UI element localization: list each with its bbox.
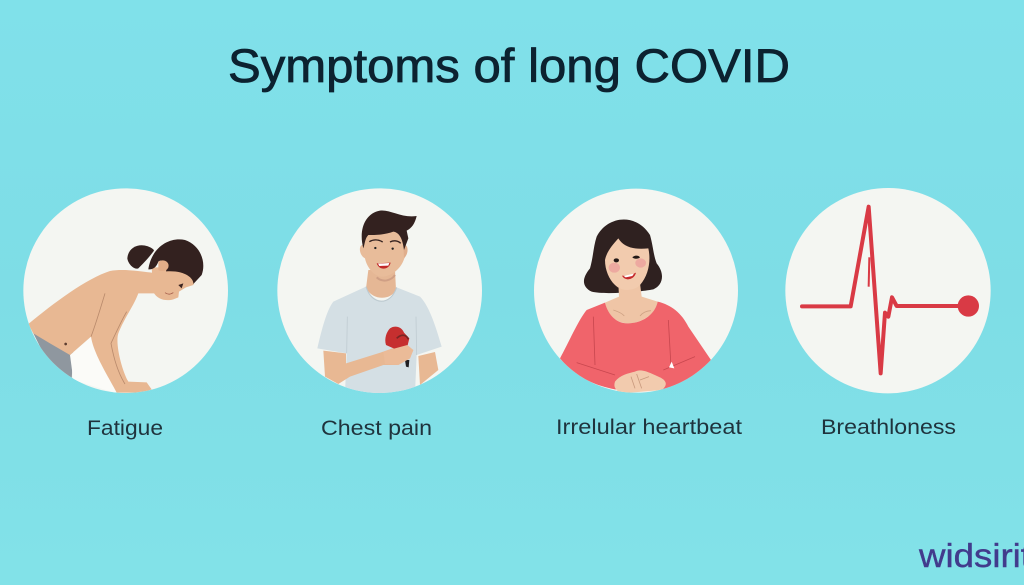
logo: widsirit xyxy=(918,537,1024,574)
label: irregular heartbeat: Irrelular heartbeat xyxy=(556,416,742,439)
face xyxy=(152,267,197,300)
heart xyxy=(385,327,409,349)
mouth xyxy=(622,273,636,279)
face xyxy=(605,238,649,290)
body xyxy=(28,270,167,393)
smile xyxy=(377,263,391,269)
label: breathlessness: Breathloness xyxy=(821,416,956,439)
hands xyxy=(614,370,666,393)
panel: breathlessness illustration xyxy=(785,188,991,393)
hand xyxy=(383,345,413,365)
panel: irregular heartbeat illustration xyxy=(534,189,738,393)
eye xyxy=(178,283,183,288)
hair back xyxy=(584,219,662,293)
panel: fatigue illustration xyxy=(23,188,228,393)
eyes xyxy=(614,258,619,262)
hair xyxy=(148,239,203,284)
neck xyxy=(366,270,396,298)
mouth xyxy=(165,293,173,294)
label: chest pain: Chest pain xyxy=(321,417,432,440)
label: fatigue: Fatigue xyxy=(87,417,163,440)
brows and eyes xyxy=(369,240,401,243)
towel xyxy=(70,352,116,392)
navel xyxy=(64,343,67,345)
ear xyxy=(158,260,169,271)
neck and chest xyxy=(605,283,658,323)
title: Symptoms of long COVID xyxy=(228,39,790,92)
t-shirt xyxy=(317,287,442,393)
ECG end dot xyxy=(958,295,979,317)
head xyxy=(360,232,404,272)
neck shadow xyxy=(377,275,395,281)
hair xyxy=(362,211,417,250)
ECG line xyxy=(802,207,962,373)
arm shadow lines xyxy=(91,293,127,384)
waistband xyxy=(30,327,73,380)
sweater xyxy=(560,302,711,389)
arms xyxy=(323,345,413,384)
panel: chest pain illustration xyxy=(277,188,482,393)
